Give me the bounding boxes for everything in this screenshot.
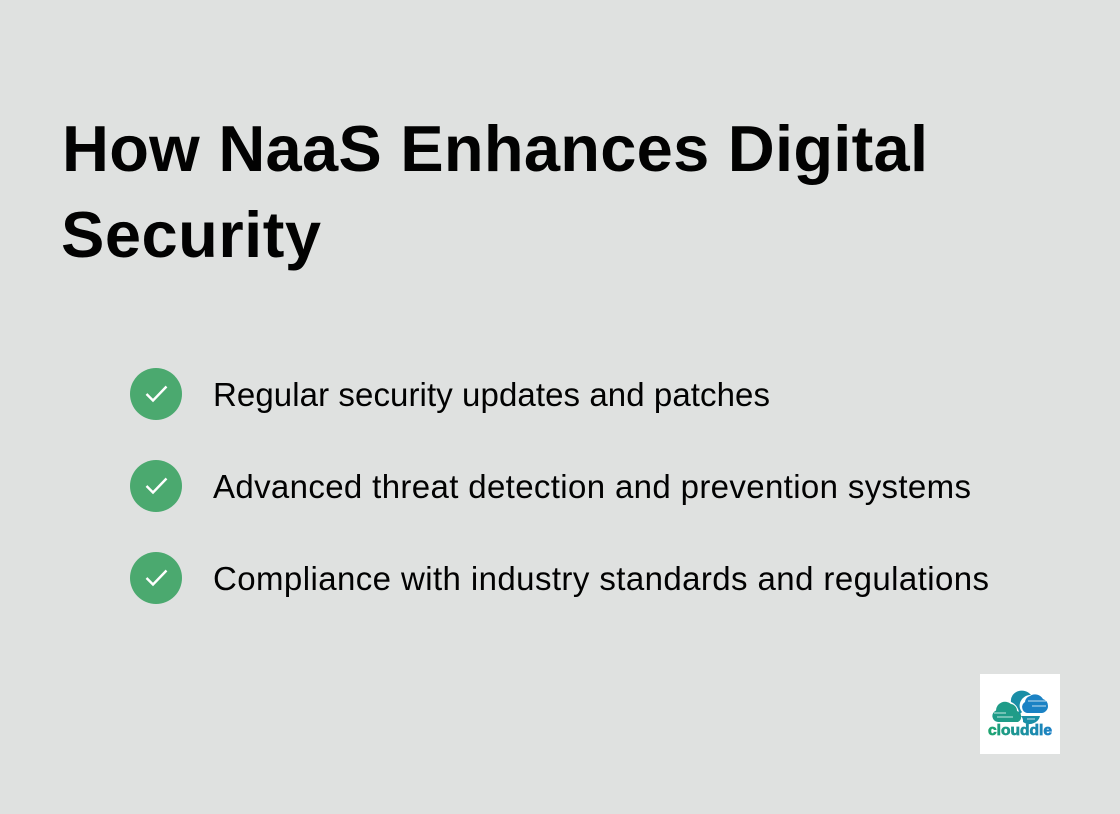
logo: clouddle: [980, 674, 1060, 754]
title: How NaaS Enhances Digital: [62, 112, 928, 185]
icon: clouds: [992, 691, 1048, 724]
item: compliance: [130, 552, 989, 604]
item: compliance: Compliance with industry standards and regulations: [213, 560, 989, 597]
logo wordmark: clouddle: [988, 722, 1052, 739]
title: Security: [61, 198, 321, 271]
item: regular security updates: Regular security updates and patches: [213, 376, 770, 413]
item: threat detection: [130, 460, 971, 512]
item: regular security updates: [130, 368, 770, 420]
checklist: [130, 368, 989, 604]
item: threat detection: Advanced threat detection and prevention systems: [213, 468, 971, 505]
title: [61, 112, 928, 271]
